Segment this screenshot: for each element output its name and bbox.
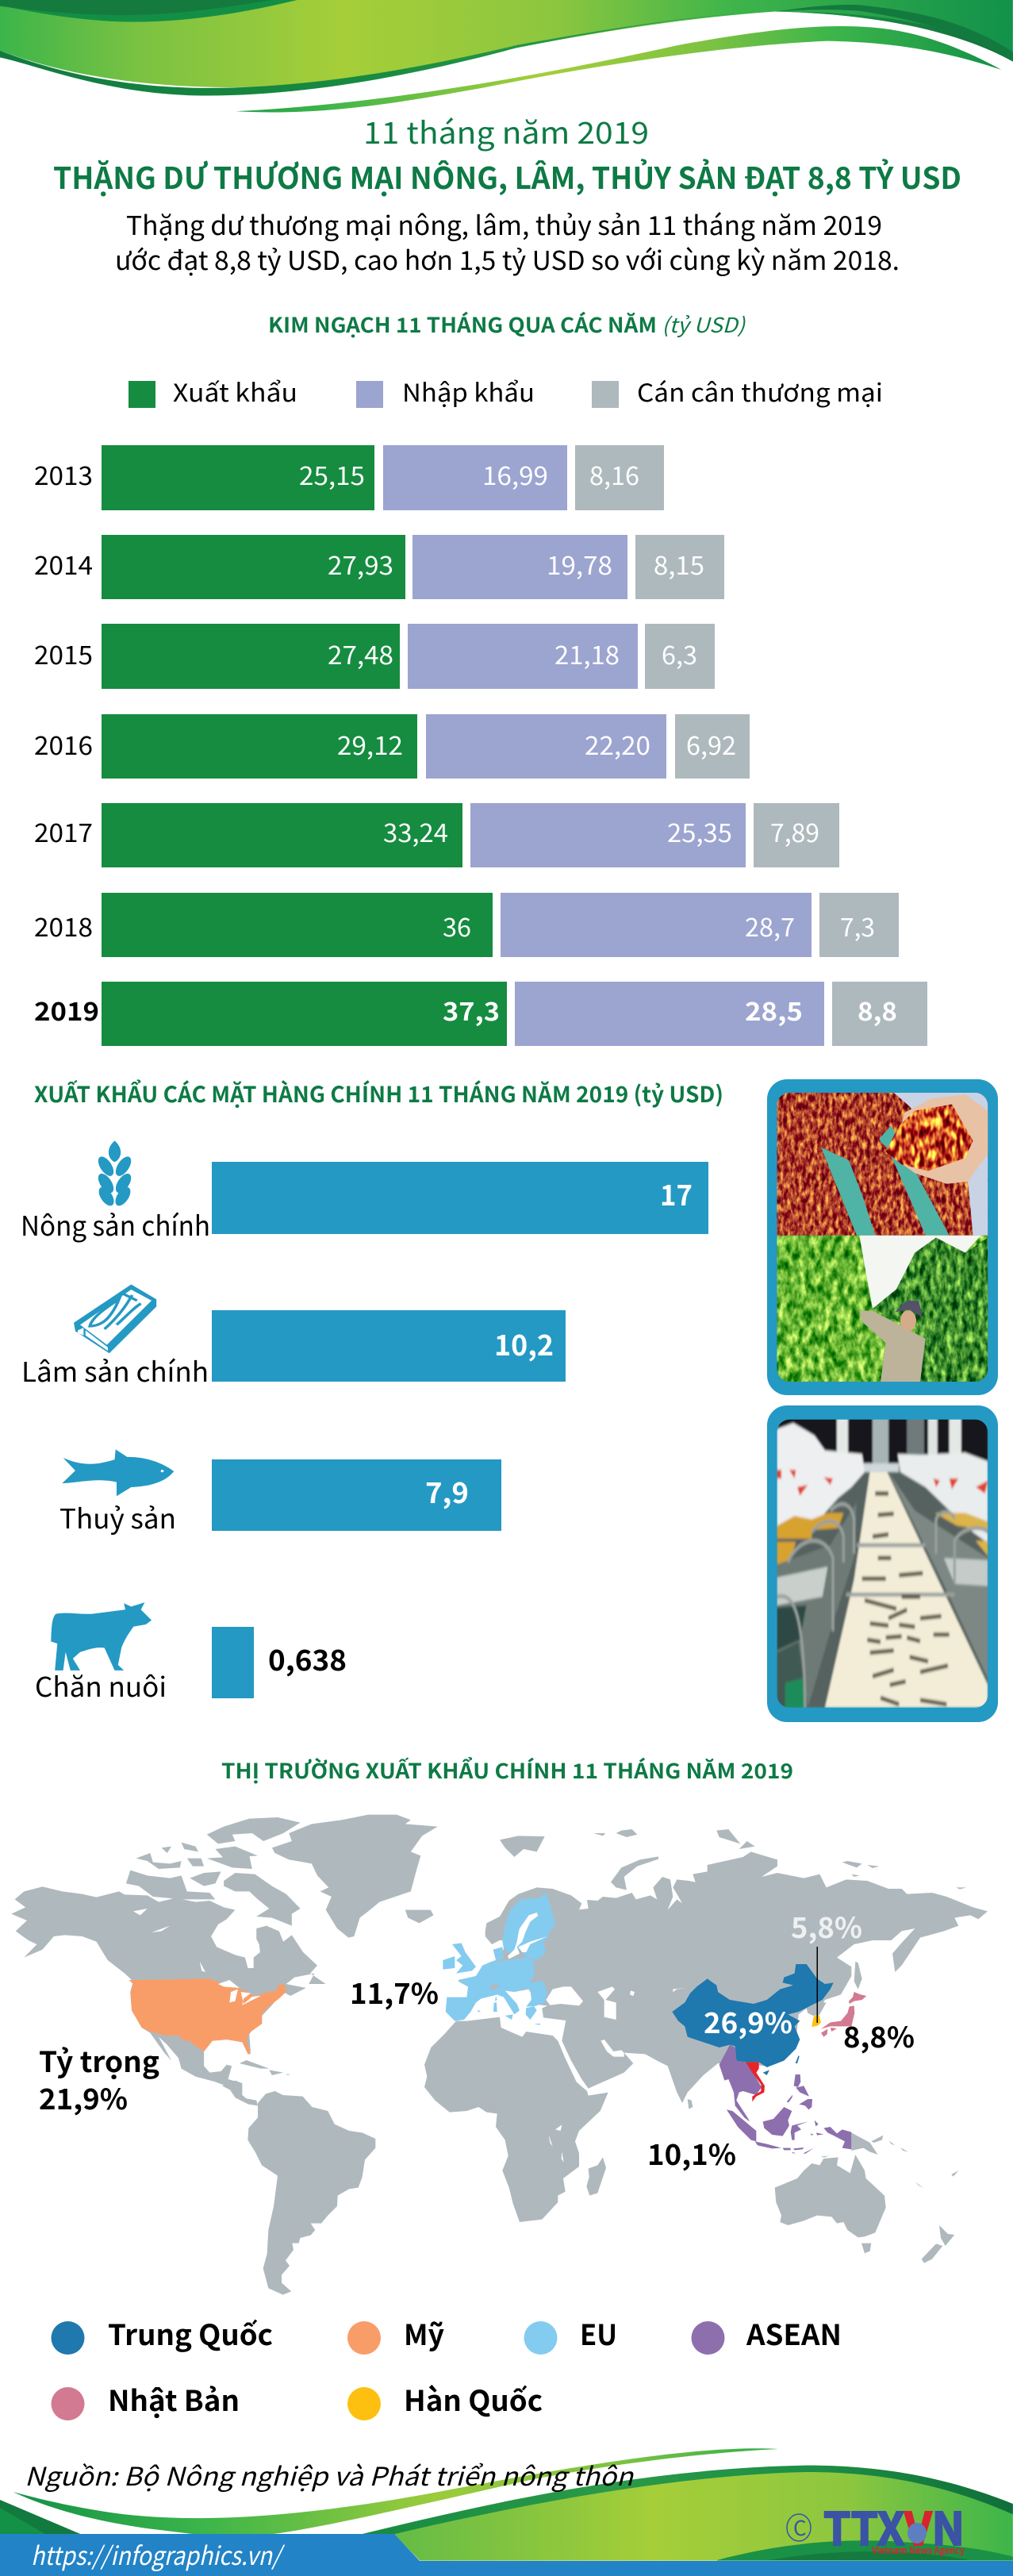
- icon: fish: [62, 1449, 174, 1496]
- icon: wheat: [95, 1140, 134, 1208]
- header wave: [0, 0, 1013, 112]
- label: USA percent: 21,9%: [39, 2077, 128, 2118]
- row 2013: 8,16: [589, 456, 639, 493]
- row 2013: 16,99: [482, 456, 548, 493]
- bar: livestock: Chăn nuôi: [35, 1666, 167, 1705]
- row 2017: 2017: [34, 813, 93, 850]
- row 2018: 2018: [34, 908, 93, 944]
- row 2018: 7,3: [840, 908, 875, 944]
- bar chart: export goods: [21, 1162, 708, 1705]
- row 2013: 25,15: [299, 456, 365, 493]
- map: European Union: [443, 1893, 555, 2025]
- legend: bar colours: Xuất khẩu: [173, 373, 297, 409]
- legend: markets: Mỹ: [404, 2313, 444, 2354]
- row 2015: 6,3: [662, 636, 697, 672]
- row 2014: 8,15: [654, 546, 704, 582]
- legend: markets: ASEAN: [746, 2313, 842, 2354]
- row 2013: [34, 445, 664, 510]
- row 2017: 25,35: [667, 813, 732, 850]
- lead line 1: Thặng dư thương mại nông, lâm, thủy sản 11 tháng năm 2019: [126, 205, 882, 243]
- bar: agriculture: 17: [660, 1173, 693, 1214]
- row 2017: 7,89: [770, 813, 819, 850]
- legend: markets: Hàn Quốc: [404, 2378, 543, 2420]
- row 2016: 2016: [34, 726, 93, 763]
- legend: markets: EU: [580, 2313, 617, 2354]
- bar: fishery: Thuỷ sản: [59, 1498, 176, 1536]
- photo: coffee and pepper harvest: [777, 1093, 988, 1382]
- row 2017: [34, 803, 839, 867]
- row 2019: 2019: [34, 992, 99, 1028]
- icon: wood plank: [74, 1285, 156, 1353]
- legend: bar colours: Nhập khẩu: [402, 373, 535, 409]
- row 2014: 19,78: [547, 546, 612, 582]
- row 2019: 28,5: [745, 992, 803, 1028]
- map: island ASEAN and Oceania: [727, 2074, 958, 2263]
- row 2013: 2013: [34, 456, 93, 493]
- logo: TTXVN: Vietnam News Agency: [871, 2543, 965, 2557]
- logo: TTXVN: C: [793, 2513, 807, 2542]
- row 2015: 21,18: [554, 636, 620, 672]
- row 2016: 6,92: [686, 726, 736, 763]
- bar: agriculture: Nông sản chính: [21, 1205, 210, 1244]
- row 2015: 27,48: [328, 636, 393, 672]
- photo frame: coffee and pepper: [767, 1079, 998, 1395]
- footer blue bar: [0, 2534, 1013, 2576]
- legend: markets: Trung Quốc: [108, 2313, 273, 2354]
- main title: THẶNG DƯ THƯƠNG MẠI NÔNG, LÂM, THỦY SẢN ĐẠT 8,8 TỶ USD: [53, 154, 961, 198]
- row 2014: 2014: [34, 546, 93, 582]
- bar: livestock: [35, 1627, 347, 1705]
- row 2016: 22,20: [585, 726, 650, 763]
- map: East Asia: [672, 1829, 966, 2121]
- map: Japan: [821, 1992, 866, 2037]
- row 2016: 29,12: [337, 726, 403, 763]
- logo: TTXVN: TTXVN: [823, 2493, 965, 2559]
- row 2016: [34, 714, 750, 779]
- label: USA share: Tỷ trọng: [39, 2040, 159, 2081]
- date heading: 11 tháng năm 2019: [363, 109, 649, 152]
- label: Japan percent: 8,8%: [843, 2015, 915, 2056]
- row 2018: 28,7: [745, 908, 795, 944]
- bar: agriculture: [21, 1162, 708, 1244]
- footer url: https://infographics.vn/: [31, 2536, 286, 2573]
- title block: [53, 109, 961, 278]
- row 2015: 2015: [34, 636, 93, 672]
- heading: annual turnover: KIM NGẠCH 11 THÁNG QUA CÁC NĂM (tỷ USD): [268, 310, 746, 339]
- row 2014: [34, 535, 724, 599]
- map: South America and Africa: [222, 2017, 608, 2295]
- map: United States: [129, 1978, 286, 2054]
- photo: shrimp processing line: [777, 1416, 988, 1708]
- world map: [11, 1815, 988, 2295]
- row 2015: [34, 624, 715, 689]
- bar: fishery: 7,9: [425, 1471, 469, 1512]
- footer source note: Nguồn: Bộ Nông nghiệp và Phát triển nông thôn: [25, 2457, 635, 2493]
- map: Vietnam: [746, 2062, 765, 2101]
- label: South Korea percent: 5,8%: [791, 1905, 862, 1947]
- legend: markets: [51, 2313, 842, 2420]
- row 2018: 36: [443, 908, 471, 944]
- map: South Korea: [812, 2015, 821, 2027]
- row 2017: 33,24: [383, 813, 448, 850]
- label: ASEAN percent: 10,1%: [647, 2132, 736, 2174]
- bar: forestry: Lâm sản chính: [21, 1351, 209, 1390]
- legend: bar colours: [129, 373, 883, 409]
- photo frame: shrimp processing: [767, 1405, 998, 1722]
- map: China: [672, 1964, 834, 2075]
- legend: bar colours: Cán cân thương mại: [637, 373, 883, 409]
- leader line: South Korea: [817, 1947, 818, 2023]
- bar: forestry: [21, 1310, 566, 1390]
- map: Eurasia: [443, 1829, 988, 2109]
- row 2018: [34, 893, 899, 957]
- footer wave: [0, 2448, 1013, 2561]
- map labels: [39, 1905, 915, 2174]
- row 2019: 37,3: [443, 992, 500, 1028]
- icon: cow: [51, 1602, 152, 1671]
- row 2019: 8,8: [858, 992, 897, 1028]
- row 2014: 27,93: [328, 546, 393, 582]
- bar: livestock: 0,638: [268, 1638, 347, 1679]
- bar chart: turnover by year: [34, 445, 927, 1046]
- bar: forestry: 10,2: [494, 1323, 554, 1364]
- label: EU percent: 11,7%: [350, 1971, 439, 2013]
- heading: main export markets: THỊ TRƯỜNG XUẤT KHẨU CHÍNH 11 THÁNG NĂM 2019: [221, 1755, 793, 1785]
- legend: markets: Nhật Bản: [108, 2378, 240, 2420]
- label: China percent: 26,9%: [704, 2001, 792, 2042]
- map: mainland ASEAN: [719, 2045, 762, 2121]
- row 2019: [34, 982, 927, 1046]
- heading: main export goods: XUẤT KHẨU CÁC MẶT HÀNG CHÍNH 11 THÁNG NĂM 2019 (tỷ USD): [34, 1078, 723, 1109]
- lead line 2: ước đạt 8,8 tỷ USD, cao hơn 1,5 tỷ USD so với cùng kỳ năm 2018.: [115, 240, 900, 278]
- bar: fishery: [59, 1459, 501, 1536]
- map: Americas and Greenland: [11, 1815, 438, 2105]
